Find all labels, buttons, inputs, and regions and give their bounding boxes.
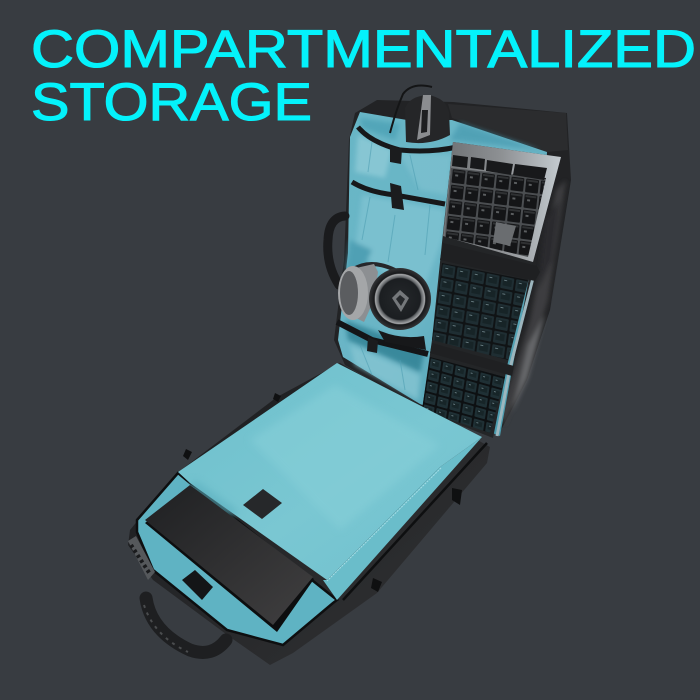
strap tab 2 — [390, 183, 404, 210]
silver frame — [443, 142, 561, 262]
divider seam — [327, 468, 441, 581]
keys section 2 — [432, 263, 528, 360]
lining creases — [360, 142, 430, 390]
title — [31, 20, 696, 132]
velcro patch — [243, 489, 282, 519]
hinge — [356, 264, 378, 322]
upper teal lining — [338, 112, 547, 436]
function key blocks — [452, 155, 547, 180]
elastic strap 3 — [337, 322, 428, 354]
lining folds — [345, 118, 540, 400]
side ear cup — [338, 266, 368, 320]
top zip band — [448, 104, 568, 152]
retaining strap 2 — [430, 343, 514, 376]
divider zip line — [343, 443, 487, 600]
backpack upper section — [328, 86, 571, 436]
divider shading — [185, 385, 440, 530]
camouflage side panel — [500, 180, 566, 425]
front ear cup — [369, 268, 431, 330]
laptop — [145, 485, 314, 632]
headband — [352, 264, 395, 270]
bare plate beside arrow keys — [493, 222, 516, 246]
title line 2: STORAGE — [31, 73, 312, 132]
front carry handle — [144, 598, 226, 652]
logo — [392, 290, 409, 312]
padded divider — [178, 363, 482, 580]
title line 1: COMPARTMENTALIZED — [31, 20, 696, 79]
laptop lid — [145, 485, 313, 625]
keys section 3 — [422, 357, 505, 433]
headphones — [338, 264, 431, 330]
side carry handle — [328, 216, 345, 285]
laptop strap — [182, 570, 213, 600]
strap tab 1 — [390, 146, 402, 164]
cable bundle under headphones — [378, 330, 426, 350]
combination lock — [128, 536, 155, 580]
backpack lower section — [128, 363, 490, 665]
laptop edge — [145, 487, 314, 632]
keys section 1 — [445, 168, 546, 257]
elastic strap 1 — [358, 127, 457, 151]
padded divider side face — [323, 437, 482, 600]
mouse — [405, 95, 450, 143]
upper shell — [334, 100, 571, 432]
strap tab 3 — [367, 337, 378, 353]
lock dials — [131, 545, 150, 574]
retaining strap 1 — [440, 243, 540, 281]
side clip left — [183, 393, 281, 460]
lower teal lining — [137, 473, 337, 645]
elastic strap 2 — [352, 182, 445, 204]
mouse cable — [390, 86, 432, 133]
lower shell — [128, 363, 490, 665]
side clip right — [371, 488, 462, 592]
keyboard edge highlight — [497, 278, 533, 436]
keyboard back plate — [422, 142, 561, 438]
keyboard — [422, 142, 561, 438]
